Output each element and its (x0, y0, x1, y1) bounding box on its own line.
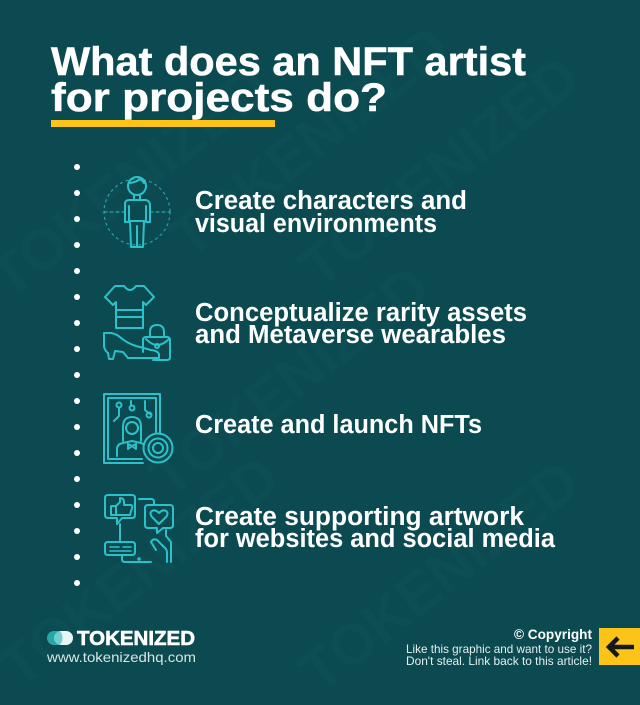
text: create characters: Create characters and (195, 187, 467, 215)
dotted timeline (74, 164, 80, 586)
text: TOKENIZED (138, 253, 441, 510)
logo: Tokenized (47, 628, 195, 650)
text: rarity assets: Conceptualize rarity assets (195, 299, 527, 327)
text: supporting artwork: Create supporting artwork (195, 503, 525, 531)
icon: character with environment circle (104, 177, 170, 247)
icon: framed portrait with target (104, 394, 172, 463)
text: create and launch NFTs: Create and launch NFTs (195, 411, 482, 439)
icon: t-shirt, shoe and bag (104, 286, 170, 360)
logo mark (47, 631, 73, 645)
text: create characters: visual environments (195, 210, 437, 238)
text: supporting artwork (195, 503, 556, 553)
text: rarity assets: and Metaverse wearables (195, 321, 506, 349)
text: create characters (195, 187, 467, 238)
website url: www.tokenizedhq.com (46, 649, 196, 665)
title underline (51, 120, 275, 127)
copyright notice: Like this graphic and want to use it? (406, 642, 592, 656)
copyright notice: © Copyright (514, 627, 592, 642)
title: What does an NFT artist (51, 40, 526, 84)
icon: social media likes and chat (105, 495, 173, 562)
title (51, 40, 526, 120)
copyright notice (406, 627, 592, 668)
title: for projects do? (51, 76, 387, 120)
text: TOKENIZED (288, 43, 591, 300)
copyright notice: Don't steal. Link back to this article! (406, 654, 592, 668)
text: rarity assets (195, 299, 527, 349)
logo wordmark: TOKENIZED (77, 628, 195, 650)
text: TOKENIZED (288, 448, 591, 705)
text: TOKENIZED (158, 13, 461, 270)
icon: yellow arrow box (599, 628, 640, 665)
text: supporting artwork: for websites and social media (195, 525, 556, 553)
